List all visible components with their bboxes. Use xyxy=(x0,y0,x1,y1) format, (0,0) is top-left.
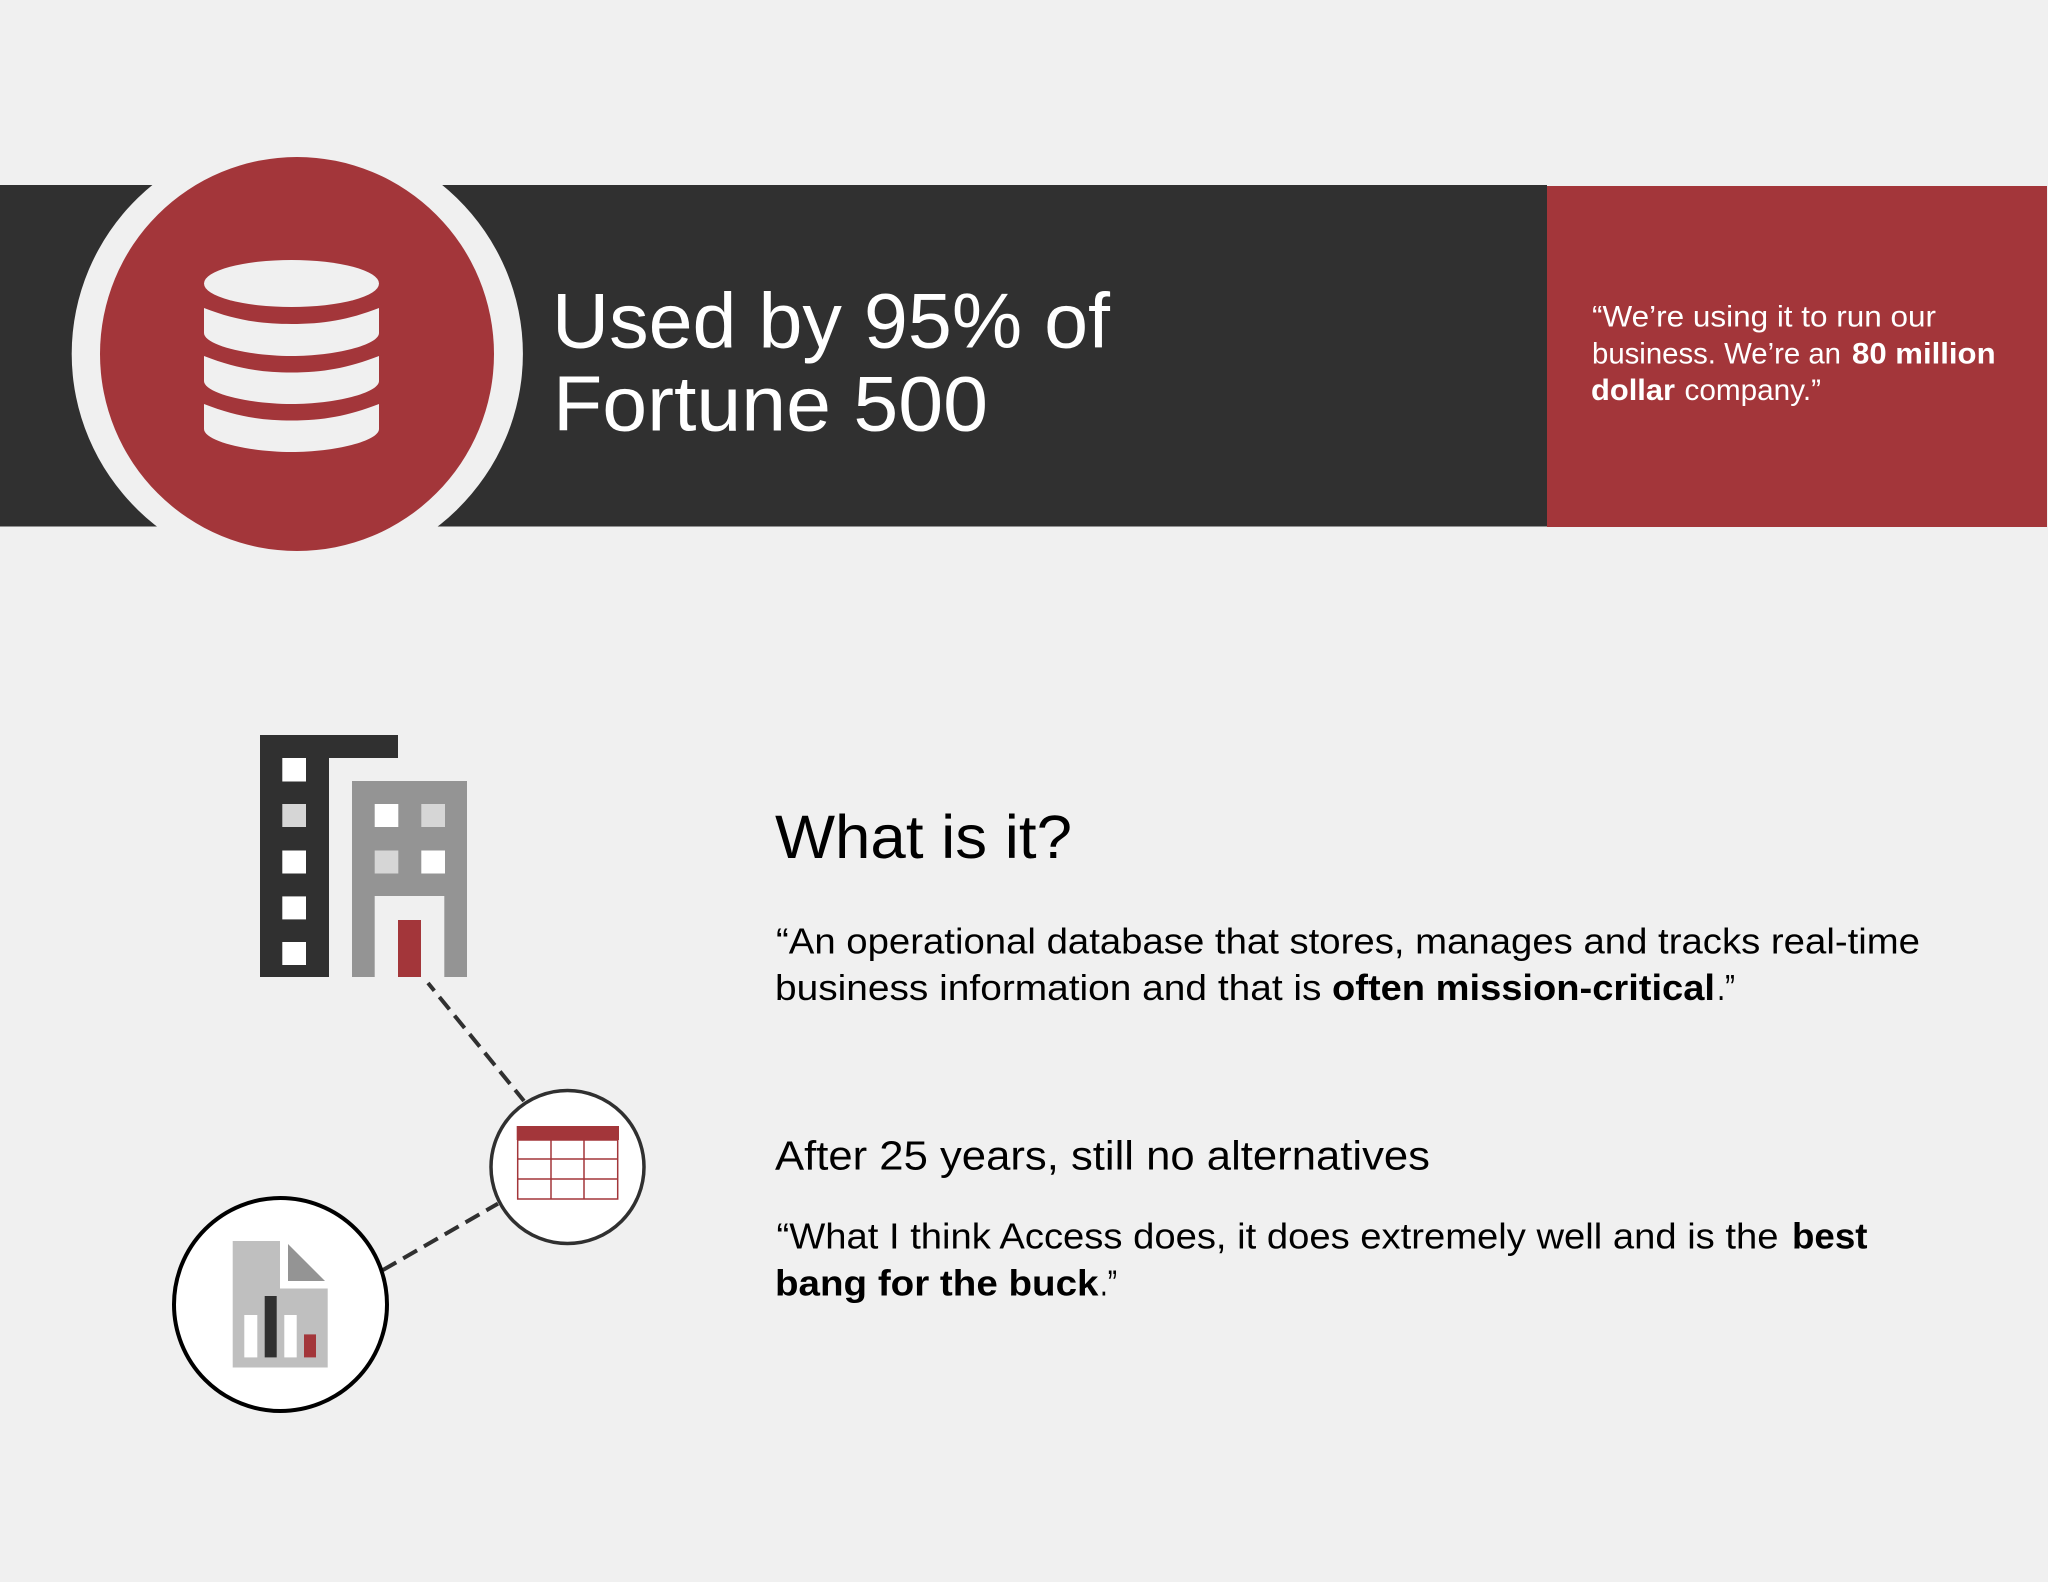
text block: definition: business information and that is xyxy=(775,967,1322,1008)
connector: table to report xyxy=(383,1204,498,1270)
icon: report in circle xyxy=(174,1198,387,1411)
headline: Fortune 500 xyxy=(553,360,988,448)
text block: testimonial: best xyxy=(1792,1215,1868,1256)
quote text: business. We’re an xyxy=(1592,337,1841,370)
header banner xyxy=(0,0,2048,574)
gray building xyxy=(352,781,467,977)
panel: quote xyxy=(0,0,2048,527)
text block: definition: .” xyxy=(1717,967,1735,1008)
icon: table in circle xyxy=(491,1090,644,1244)
text block: definition: “An operational database that stores, manages and tracks real-time xyxy=(776,920,1920,961)
dark banner bar xyxy=(0,185,1547,526)
heading: what is it: What is it? xyxy=(775,803,1072,872)
text block: definition: often mission-critical xyxy=(1332,967,1715,1008)
text block: testimonial: bang for the buck xyxy=(775,1263,1099,1304)
text block: testimonial: “What I think Access does, it does extremely well and is the xyxy=(776,1215,1778,1256)
quote text: “We’re using it to run our xyxy=(1592,301,1936,334)
connector: building to table xyxy=(428,983,524,1101)
quote text: company.” xyxy=(1684,374,1821,407)
icon: database in red circle xyxy=(72,133,523,574)
heading: after 25 years: After 25 years, still no alternatives xyxy=(775,1132,1430,1178)
quote text: 80 million xyxy=(1852,337,1996,370)
quote text: dollar xyxy=(1591,374,1675,407)
dark tower xyxy=(260,735,398,977)
headline: Used by 95% of xyxy=(552,276,1110,364)
icon: office buildings xyxy=(260,735,467,977)
text block: testimonial: .” xyxy=(1100,1263,1117,1304)
